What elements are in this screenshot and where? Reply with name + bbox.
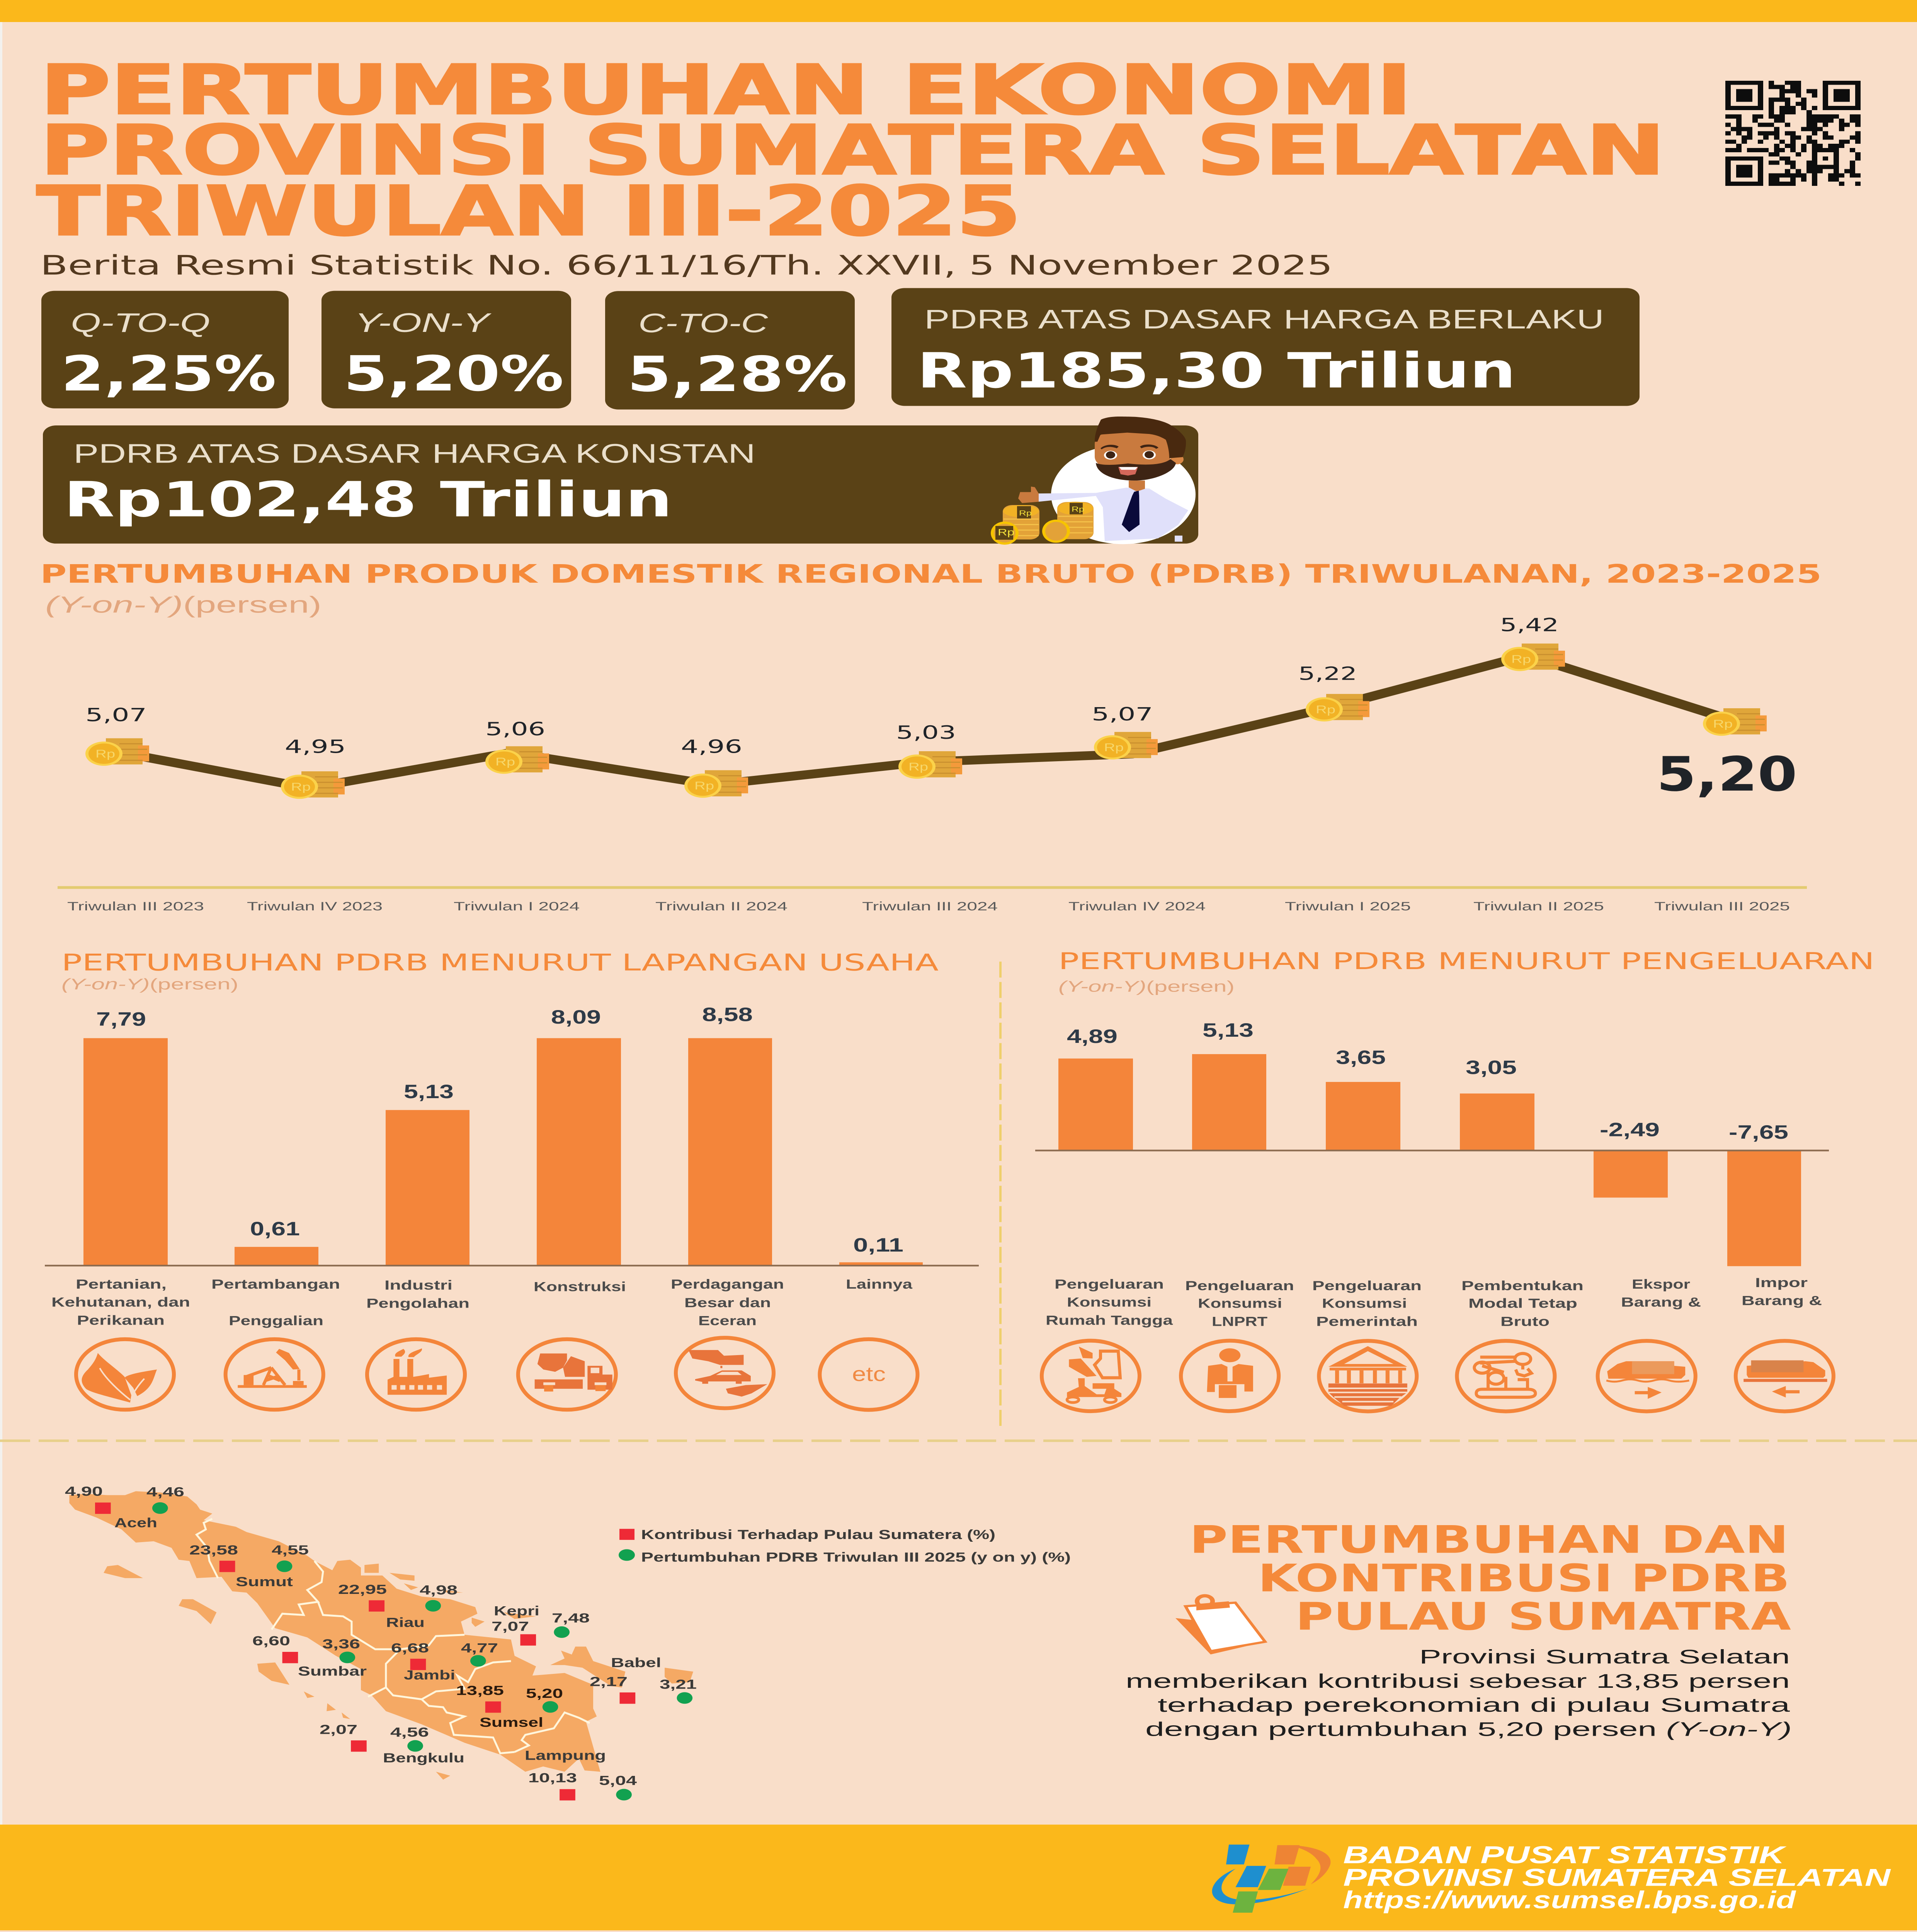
heading: pertumbuhan dan kontribusi: KONTRIBUSI PDRB: [1258, 1556, 1790, 1600]
panel: pengeluaran: [1035, 948, 1874, 1329]
illustration: man with coins: Rp: [1019, 509, 1032, 517]
map labels: [65, 1484, 697, 1788]
title: TRIWULAN III-2025: [37, 172, 1021, 251]
map labels: 6,68: [391, 1640, 429, 1655]
subtitle: Berita Resmi Statistik No. 66/11/16/Th. XXVII, 5 November 2025: [40, 250, 1333, 281]
bar chart: pengeluaran: Ekspor: [1632, 1277, 1690, 1292]
bar chart: pengeluaran: Modal Tetap: [1468, 1296, 1577, 1311]
point: Triwulan II 2024: [684, 770, 748, 798]
line chart: 5,06: [485, 718, 545, 740]
title: PERTUMBUHAN EKONOMI: [40, 51, 1412, 129]
icon: etc: etc: [852, 1362, 886, 1385]
map labels: Bengkulu: [383, 1750, 464, 1765]
map labels: Kepri: [494, 1603, 539, 1618]
map labels: 4,46: [146, 1484, 184, 1499]
line chart heading: [40, 559, 1822, 618]
bar chart: lapangan usaha: Konstruksi: [534, 1279, 626, 1294]
icon: export ship: [1598, 1341, 1696, 1412]
map labels: 5,20: [526, 1686, 563, 1701]
map labels: Sumsel: [480, 1715, 543, 1730]
card: Q-to-Q: Q-TO-Q: [71, 308, 210, 338]
bar chart: lapangan usaha: 7,79: [96, 1009, 146, 1030]
card: PDRB harga konstan: [43, 425, 1198, 544]
bar chart: lapangan usaha: Pertambangan: [211, 1277, 340, 1292]
map labels: 4,55: [272, 1543, 309, 1557]
point: Triwulan I 2025: Rp: [1316, 704, 1335, 716]
illustration: man with coins: Rp: [998, 527, 1014, 537]
point: Triwulan II 2025: Rp: [1511, 653, 1531, 665]
bar chart: lapangan usaha: 0,61: [250, 1218, 300, 1240]
bar chart: pengeluaran: Barang &: [1742, 1293, 1822, 1308]
point: Triwulan IV 2024: Rp: [1104, 742, 1124, 754]
icon: food and scooter: [1042, 1341, 1140, 1411]
card: C-to-C: 5,28%: [627, 346, 847, 403]
card: C-to-C: [605, 291, 855, 410]
bar chart: pengeluaran: Konsumsi: [1322, 1296, 1407, 1311]
line chart: Triwulan I 2024: [454, 900, 580, 913]
icon: oil pump: [226, 1339, 323, 1410]
heading: lapangan usaha: (Y-on-Y) (persen): [61, 976, 238, 993]
icon: truck: [518, 1339, 616, 1410]
map labels: 6,60: [252, 1633, 290, 1648]
bar chart: pengeluaran: -7,65: [1729, 1121, 1788, 1143]
icon: leaves: [76, 1339, 174, 1410]
bar chart: pengeluaran: 3,65: [1336, 1047, 1386, 1068]
bar chart: pengeluaran: Barang &: [1621, 1294, 1701, 1310]
heading: lapangan usaha: [61, 949, 939, 993]
line chart: Triwulan IV 2023: [247, 900, 383, 913]
bar chart: lapangan usaha: Lainnya: [846, 1277, 913, 1292]
icon ring: etc: [820, 1339, 917, 1410]
legend: Pertumbuhan PDRB Triwulan III 2025 (y on y) (%): [641, 1549, 1071, 1565]
bar chart: lapangan usaha: 8,09: [551, 1006, 601, 1028]
icon: robot arm: [1457, 1341, 1555, 1412]
map labels: Jambi: [404, 1667, 455, 1682]
line chart: Triwulan III 2025: [1654, 900, 1790, 913]
bar chart: lapangan usaha: Penggalian: [229, 1313, 323, 1328]
title: [37, 51, 1665, 251]
card: Y-on-Y: [321, 291, 571, 408]
point: Triwulan III 2023: [85, 738, 149, 766]
point: Triwulan III 2024: Rp: [908, 761, 928, 773]
icon: government building: [1319, 1341, 1417, 1412]
bar chart: pengeluaran: Pemerintah: [1316, 1314, 1418, 1329]
bar chart: lapangan usaha: [45, 1003, 979, 1328]
QR code: [1725, 83, 1861, 184]
line chart: Triwulan IV 2024: [1068, 900, 1206, 913]
bar chart: pengeluaran: Konsumsi: [1198, 1296, 1282, 1311]
footer text: [1343, 1842, 1891, 1914]
line chart: Triwulan II 2025: [1473, 900, 1604, 913]
map labels: 13,85: [456, 1683, 504, 1698]
line chart: Triwulan II 2024: [655, 900, 788, 913]
map labels: Sumbar: [298, 1663, 367, 1679]
map labels: 23,58: [189, 1543, 238, 1557]
card: PDRB harga berlaku: PDRB ATAS DASAR HARGA BERLAKU: [924, 304, 1604, 335]
map labels: 2,07: [320, 1722, 357, 1737]
map labels: Riau: [386, 1615, 425, 1630]
point: Triwulan III 2025: [1703, 708, 1767, 736]
icon: person: [1181, 1341, 1279, 1411]
bar chart: lapangan usaha: Industri: [384, 1277, 452, 1293]
card: PDRB harga konstan: Rp102,48 Triliun: [64, 472, 672, 528]
heading: pengeluaran: [1058, 948, 1874, 995]
bar chart: pengeluaran: Konsumsi: [1067, 1294, 1152, 1310]
map labels: 4,77: [461, 1640, 498, 1655]
text block: summary: dengan pertumbuhan 5,20 persen (Y-on-Y): [1145, 1718, 1792, 1740]
line chart: 5,20: [1657, 747, 1797, 802]
footer text: https://www.sumsel.bps.go.id: [1343, 1887, 1796, 1914]
map labels: Aceh: [114, 1515, 157, 1530]
footer text: BADAN PUSAT STATISTIK: [1343, 1842, 1787, 1869]
bar chart: pengeluaran: 5,13: [1203, 1019, 1254, 1041]
bar chart: pengeluaran: Bruto: [1500, 1314, 1550, 1329]
map labels: Lampung: [525, 1748, 606, 1763]
point: Triwulan I 2024: [485, 746, 549, 774]
heading: pertumbuhan dan kontribusi: PERTUMBUHAN DAN: [1189, 1518, 1789, 1562]
card: Q-to-Q: [41, 291, 289, 408]
bar chart: pengeluaran: Pengeluaran: [1185, 1278, 1294, 1293]
point: Triwulan III 2024: [898, 751, 962, 779]
bar chart: lapangan usaha: 5,13: [404, 1081, 454, 1102]
footer band: [0, 1825, 1917, 1930]
logo: BPS: [1212, 1845, 1330, 1913]
bar chart: lapangan usaha: Besar dan: [684, 1295, 771, 1310]
line chart: 4,96: [681, 736, 742, 757]
map labels: 3,21: [660, 1677, 697, 1692]
bar chart: lapangan usaha: 0,11: [853, 1234, 903, 1256]
heading: pertumbuhan dan kontribusi: PULAU SUMATRA: [1295, 1595, 1791, 1639]
footer text: PROVINSI SUMATERA SELATAN: [1343, 1864, 1891, 1891]
panel: lapangan usaha: [45, 949, 1834, 1429]
point: Triwulan IV 2023: [281, 771, 345, 799]
map labels: 7,07: [492, 1619, 529, 1634]
heading: pengeluaran: (Y-on-Y) (persen): [1058, 978, 1235, 995]
illustration: man with coins: Rp: [1072, 505, 1084, 513]
top band: [0, 0, 1917, 22]
icon: clipboard: [1175, 1596, 1265, 1655]
map labels: 4,98: [420, 1582, 458, 1597]
bar chart: pengeluaran: Pembentukan: [1461, 1278, 1584, 1293]
map labels: 22,95: [338, 1582, 387, 1597]
bar chart: lapangan usaha: Eceran: [698, 1313, 757, 1328]
map labels: Sumut: [236, 1574, 293, 1589]
bar chart: pengeluaran: -2,49: [1600, 1119, 1660, 1140]
bar chart: pengeluaran: LNPRT: [1212, 1314, 1267, 1329]
map labels: 4,90: [65, 1484, 103, 1499]
map labels: 5,04: [599, 1773, 637, 1788]
line chart: Triwulan I 2025: [1285, 900, 1411, 913]
line chart: [58, 614, 1807, 913]
line chart: 5,42: [1500, 614, 1559, 636]
bar chart: pengeluaran: Pengeluaran: [1312, 1278, 1422, 1293]
line chart: 5,07: [1092, 704, 1153, 725]
map labels: Babel: [611, 1655, 661, 1670]
bar chart: pengeluaran: 3,05: [1466, 1056, 1517, 1078]
heading: lapangan usaha: PERTUMBUHAN PDRB MENURUT LAPANGAN USAHA: [61, 949, 939, 976]
icon: factory: [367, 1339, 465, 1410]
card: Q-to-Q: 2,25%: [61, 346, 276, 402]
card: PDRB harga berlaku: [891, 288, 1640, 406]
point: Triwulan IV 2023: Rp: [291, 781, 311, 793]
line chart: 5,03: [896, 722, 956, 743]
text block: summary: [1126, 1646, 1792, 1740]
map labels: 2,17: [590, 1674, 628, 1689]
icon: hands and car: [676, 1338, 774, 1408]
map labels: 7,48: [552, 1611, 590, 1625]
point: Triwulan I 2024: Rp: [495, 756, 515, 768]
line chart: Triwulan III 2024: [862, 900, 998, 913]
bar chart: pengeluaran: 4,89: [1067, 1026, 1118, 1047]
map labels: 4,56: [390, 1725, 429, 1740]
bar chart: lapangan usaha: Perikanan: [77, 1313, 165, 1328]
card: PDRB harga berlaku: Rp185,30 Triliun: [917, 343, 1516, 399]
line chart: 5,22: [1298, 663, 1357, 684]
bar chart: pengeluaran: Impor: [1755, 1275, 1808, 1290]
heading: pertumbuhan dan kontribusi: [1189, 1518, 1791, 1639]
point: Triwulan I 2025: [1306, 694, 1369, 721]
map labels: 3,36: [322, 1636, 360, 1651]
text block: summary: memberikan kontribusi sebesar 13,85 persen: [1126, 1670, 1790, 1692]
card: PDRB harga konstan: PDRB ATAS DASAR HARGA KONSTAN: [73, 439, 755, 469]
map shape: [69, 1491, 693, 1801]
map: Sumatra: [65, 1484, 1071, 1801]
bar chart: lapangan usaha: Perdagangan: [671, 1277, 784, 1292]
bar chart: pengeluaran: Pengeluaran: [1055, 1277, 1164, 1292]
bar chart: pengeluaran: Rumah Tangga: [1046, 1313, 1173, 1328]
card: Y-on-Y: Y-ON-Y: [355, 308, 492, 338]
line chart: Triwulan III 2023: [67, 900, 204, 913]
point: Triwulan III 2023: Rp: [95, 748, 115, 760]
bar chart: pengeluaran: [1035, 1019, 1829, 1329]
line chart: 4,95: [285, 736, 346, 757]
bar chart: lapangan usaha: Kehutanan, dan: [51, 1294, 190, 1310]
heading: pengeluaran: PERTUMBUHAN PDRB MENURUT PENGELUARAN: [1058, 948, 1874, 975]
line chart heading: (Y-on-Y) (persen): [45, 592, 321, 618]
line chart heading: PERTUMBUHAN PRODUK DOMESTIK REGIONAL BRUTO (PDRB) TRIWULANAN, 2023-2025: [40, 559, 1822, 589]
legend: [619, 1527, 1071, 1565]
bar chart: lapangan usaha: Pertanian,: [76, 1277, 167, 1292]
point: Triwulan III 2025: Rp: [1713, 718, 1733, 730]
point: Triwulan IV 2024: [1094, 732, 1158, 760]
text block: summary: terhadap perekonomian di pulau Sumatra: [1158, 1694, 1790, 1716]
card: C-to-C: C-TO-C: [638, 308, 768, 338]
point: Triwulan II 2024: Rp: [694, 780, 714, 792]
title: PROVINSI SUMATERA SELATAN: [40, 111, 1665, 190]
map labels: 10,13: [528, 1770, 577, 1785]
bar chart: lapangan usaha: Pengolahan: [366, 1296, 469, 1311]
bar chart: lapangan usaha: 8,58: [702, 1003, 753, 1025]
icon: import ship: [1736, 1341, 1834, 1412]
text block: summary: Provinsi Sumatra Selatan: [1419, 1646, 1790, 1668]
line chart: 5,07: [85, 704, 147, 726]
point: Triwulan II 2025: [1501, 643, 1565, 671]
card: Y-on-Y: 5,20%: [344, 346, 564, 402]
illustration: man with coins: [991, 417, 1196, 545]
legend: Kontribusi Terhadap Pulau Sumatera (%): [641, 1527, 995, 1542]
